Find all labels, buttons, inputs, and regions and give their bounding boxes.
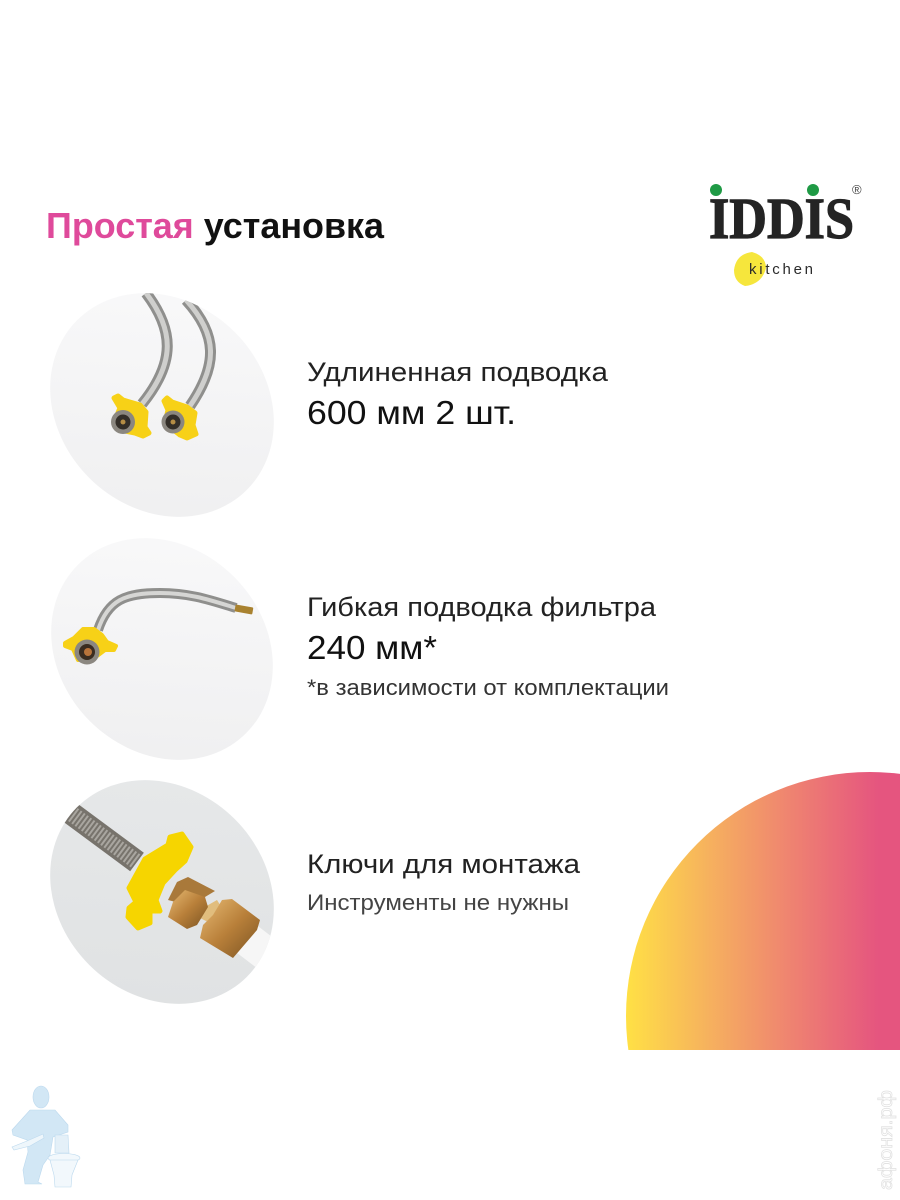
logo: IDDIS kitchen: ® (852, 182, 862, 197)
text: extended hose: Удлиненная подводка (307, 357, 609, 387)
text: mounting keys: Инструменты не нужны (307, 890, 569, 915)
decorative gradient arc (626, 772, 900, 1050)
panel: mounting key photo (50, 780, 274, 1004)
title: Простая установка (46, 205, 385, 246)
text: mounting keys (307, 849, 581, 915)
text: extended hose (307, 357, 609, 431)
icon: plumber watermark (12, 1086, 80, 1187)
panel: filter hose photo (6, 493, 318, 805)
text: flexible filter hose: *в зависимости от комплектации (307, 675, 669, 700)
logo: IDDIS kitchen (709, 182, 862, 286)
text: flexible filter hose: 240 мм* (307, 629, 437, 666)
text: watermark site name: афоня.рф (876, 1090, 897, 1190)
logo: IDDIS kitchen: IDDIS (709, 186, 854, 251)
panel: two hoses photo (50, 293, 274, 517)
logo: IDDIS kitchen: kitchen (749, 261, 813, 278)
text: flexible filter hose: Гибкая подводка фильтра (307, 592, 657, 622)
text: mounting keys: Ключи для монтажа (307, 849, 581, 879)
text: flexible filter hose (307, 592, 669, 700)
text: extended hose: 600 мм 2 шт. (307, 394, 516, 431)
